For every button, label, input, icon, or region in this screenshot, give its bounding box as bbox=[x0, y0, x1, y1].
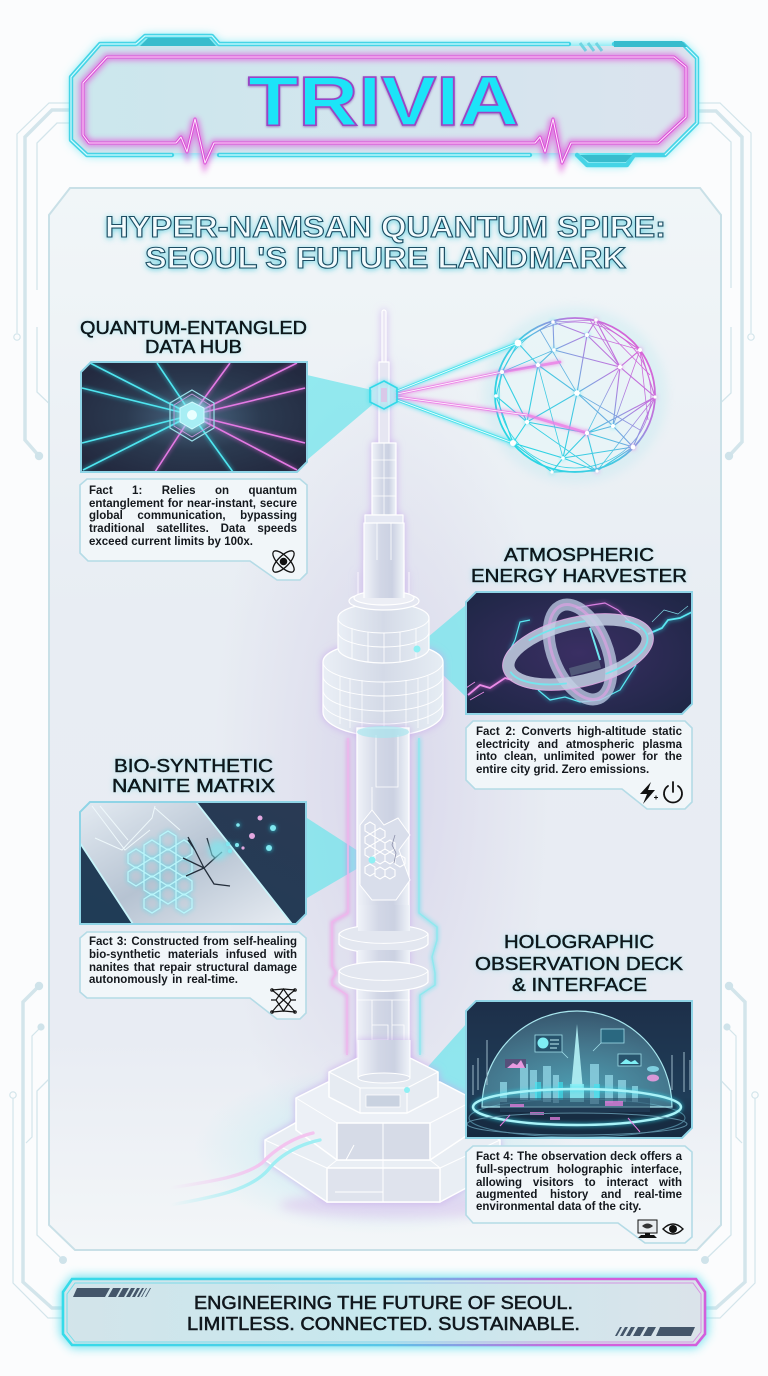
illustration: Quantum Spire tower bbox=[170, 310, 500, 1205]
image: entanglement rays bbox=[80, 361, 308, 473]
panel: atmospheric energy harvester bbox=[465, 544, 693, 809]
fact box outline bbox=[80, 932, 306, 1019]
text: autonomously in real-time. bbox=[89, 974, 238, 986]
heading: ATMOSPHERIC bbox=[504, 544, 654, 565]
diagram: quantum network sphere bbox=[370, 307, 667, 483]
spire hexagon node bbox=[370, 381, 397, 409]
fact box outline bbox=[80, 479, 307, 580]
heading: & INTERFACE bbox=[512, 974, 647, 995]
text: exceed current limits by 100x. bbox=[89, 536, 253, 548]
text: fact 2 bbox=[476, 726, 682, 776]
heading bbox=[80, 317, 307, 357]
text: Fact 4: The observation deck offers a bbox=[476, 1151, 682, 1163]
text: Fact 2: Converts high-altitude static bbox=[476, 726, 682, 738]
heading bbox=[475, 931, 684, 995]
heading: HOLOGRAPHIC bbox=[504, 931, 654, 952]
title banner bbox=[71, 36, 697, 165]
text: global communication, bypassing bbox=[89, 510, 297, 522]
callout anchors bbox=[404, 646, 420, 1093]
fact box outline bbox=[466, 1146, 692, 1243]
tower: power cables bbox=[170, 1133, 320, 1205]
footer text: LIMITLESS. CONNECTED. SUSTAINABLE. bbox=[187, 1314, 580, 1334]
tower: stacked rings bbox=[339, 905, 428, 991]
panel: holographic observation deck bbox=[465, 931, 693, 1243]
title text: TRIVIA bbox=[248, 62, 519, 140]
image: self-healing structure bbox=[79, 801, 307, 925]
heading: OBSERVATION DECK bbox=[475, 953, 684, 974]
subtitle heading: SEOUL'S FUTURE LANDMARK bbox=[145, 242, 626, 275]
text: allowing visitors to interact with bbox=[476, 1177, 682, 1189]
tower ambient glow bbox=[194, 340, 574, 1235]
footer stripes bbox=[73, 1288, 695, 1336]
icon: holographic monitor bbox=[638, 1220, 657, 1238]
tower: hexagonal base bbox=[265, 1040, 500, 1202]
text: traditional satellites. Data speeds bbox=[89, 523, 297, 535]
panel: quantum-entangled data hub bbox=[80, 317, 308, 580]
tower: main lower shaft bbox=[357, 726, 410, 1078]
icon: atom bbox=[270, 548, 297, 575]
heading: NANITE MATRIX bbox=[112, 775, 275, 796]
text: full-spectrum holographic interface, bbox=[476, 1164, 682, 1176]
text: fact 3 bbox=[89, 936, 297, 986]
heading: BIO-SYNTHETIC bbox=[114, 755, 273, 776]
text: Fact 1: Relies on quantum bbox=[89, 485, 297, 497]
text: into clean, unlimited power for the bbox=[476, 751, 682, 763]
text: entire city grid. Zero emissions. bbox=[476, 764, 649, 776]
icon: lightning bolt bbox=[640, 782, 658, 804]
panel: bio-synthetic nanite matrix bbox=[79, 755, 307, 1019]
tower: lower observation drum bbox=[323, 642, 443, 736]
heading: ENERGY HARVESTER bbox=[471, 565, 687, 586]
fact box outline bbox=[466, 721, 692, 809]
text: bio-synthetic materials infused with bbox=[89, 949, 297, 961]
tower: hexagonal nanite patch bbox=[360, 810, 410, 900]
subtitle heading: HYPER-NAMSAN QUANTUM SPIRE: bbox=[105, 211, 666, 244]
image: holographic city dome bbox=[465, 1000, 693, 1139]
callout beams bbox=[307, 375, 467, 1130]
text: Fact 3: Constructed from self-healing bbox=[89, 936, 297, 948]
footer banner bbox=[60, 1276, 708, 1348]
text: entanglement for near-instant, secure bbox=[89, 498, 297, 510]
heading bbox=[112, 755, 275, 796]
tower: side conduits bbox=[332, 738, 437, 1055]
panel: main content frame bbox=[49, 188, 721, 1250]
text: nanites that repair structural damage bbox=[89, 962, 297, 974]
tower: middle drum and small ring bbox=[338, 560, 429, 663]
heading bbox=[471, 544, 687, 586]
heading: DATA HUB bbox=[145, 336, 242, 357]
text: environmental data of the city. bbox=[476, 1201, 641, 1213]
footer text bbox=[187, 1293, 580, 1334]
icon: eye bbox=[663, 1224, 683, 1234]
text: fact 1 bbox=[89, 485, 297, 548]
heading: QUANTUM-ENTANGLED bbox=[80, 317, 307, 338]
image: energy rings bbox=[465, 591, 693, 715]
footer text: ENGINEERING THE FUTURE OF SEOUL. bbox=[194, 1293, 573, 1313]
icon: power symbol bbox=[664, 782, 682, 802]
icon: nanite lattice bbox=[271, 989, 296, 1013]
subtitle heading bbox=[105, 211, 666, 275]
text: fact 4 bbox=[476, 1151, 682, 1213]
text: electricity and atmospheric plasma bbox=[476, 739, 682, 751]
text: augmented history and real-time bbox=[476, 1189, 682, 1201]
tower: spire and upper shaft bbox=[358, 310, 409, 603]
